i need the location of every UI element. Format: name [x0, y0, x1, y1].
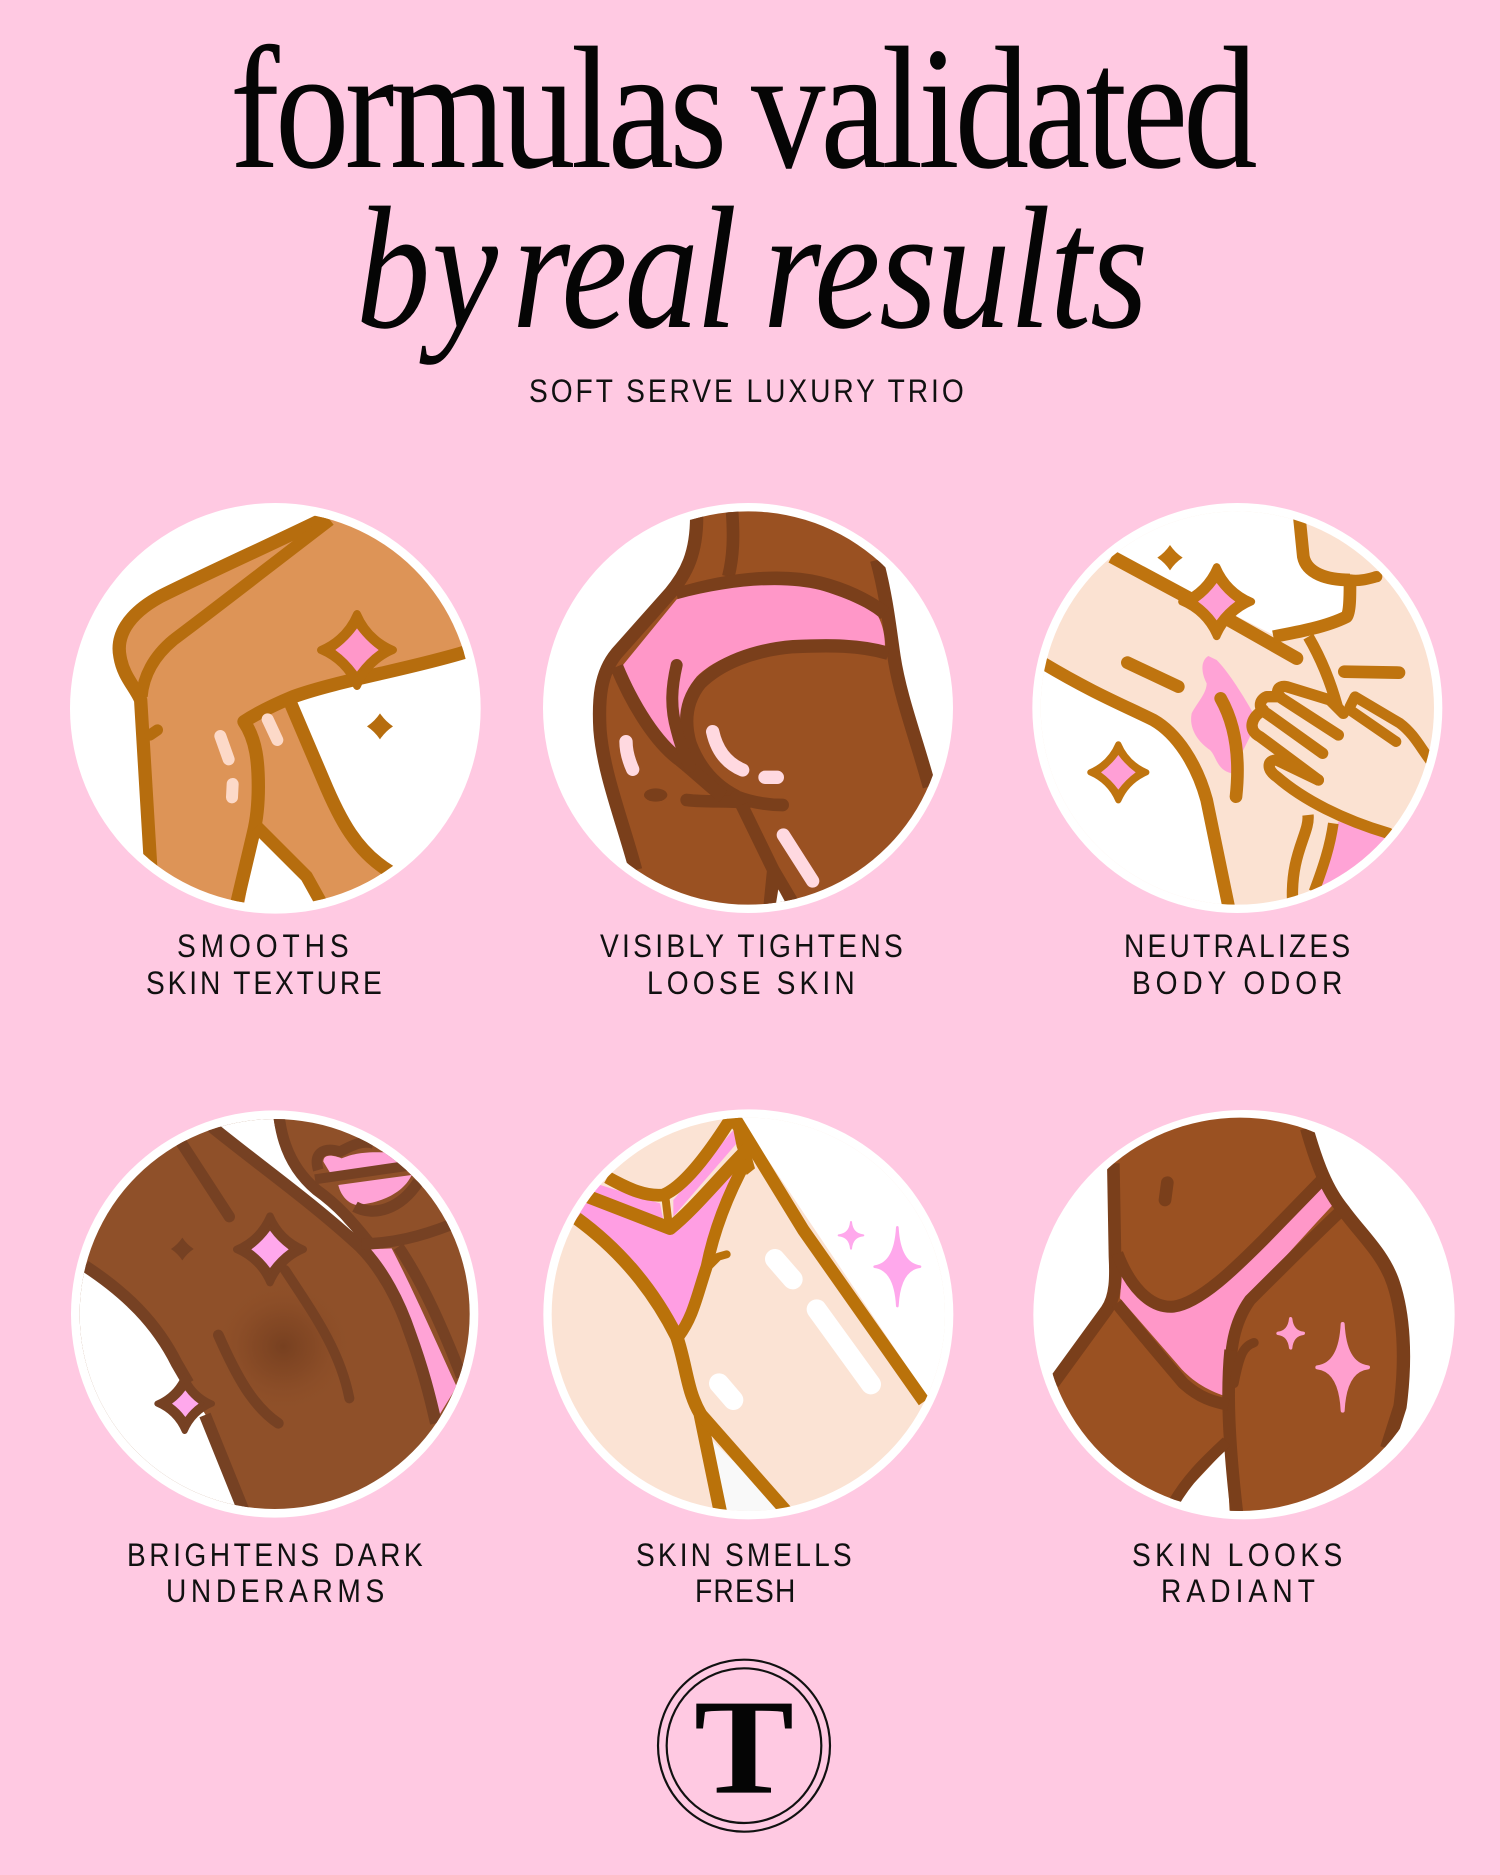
- label: RADIANT: [1161, 1574, 1315, 1609]
- icon: torso and hip: [1033, 1110, 1455, 1520]
- icon: dark underarm: [71, 1110, 478, 1518]
- subtitle: SOFT SERVE LUXURY TRIO: [529, 374, 964, 409]
- label: [600, 929, 903, 1001]
- panel: skin smells fresh: [543, 1109, 954, 1602]
- title: validated: [751, 12, 1258, 206]
- title: by: [356, 172, 499, 366]
- label: FRESH: [695, 1574, 795, 1609]
- label: LOOSE SKIN: [647, 966, 855, 1001]
- panel: brightens dark underarms: [71, 1110, 478, 1602]
- icon: sparkles: [1090, 545, 1251, 800]
- label: [636, 1538, 852, 1609]
- label: SKIN SMELLS: [636, 1538, 852, 1573]
- icon: sparkles: [839, 1222, 920, 1306]
- label: SKIN LOOKS: [1132, 1538, 1342, 1573]
- label: UNDERARMS: [166, 1574, 384, 1609]
- panel: neutralizes body odor: [1032, 503, 1442, 994]
- icon: underarm with hand: [1032, 503, 1442, 913]
- label: BODY ODOR: [1132, 966, 1342, 1001]
- logo: T monogram: [658, 1660, 830, 1832]
- logo: T monogram: T: [694, 1673, 794, 1823]
- icon: sparkle: [321, 614, 393, 686]
- label: SKIN TEXTURE: [146, 966, 382, 1001]
- label: SMOOTHS: [177, 929, 349, 964]
- title: [230, 12, 1258, 366]
- panel: visibly tightens loose skin: [543, 480, 953, 1001]
- icon: knee: [70, 503, 481, 914]
- panel: smooths skin texture: [70, 480, 481, 1001]
- title: results: [763, 172, 1148, 366]
- title: real: [512, 172, 737, 366]
- icon: buttocks: [543, 503, 953, 913]
- icon: hip and thigh: [543, 1109, 954, 1520]
- label: [127, 1538, 423, 1609]
- icon: sparkles: [1278, 1319, 1368, 1411]
- label: [1124, 929, 1350, 1001]
- label: [146, 929, 382, 1001]
- title: formulas: [230, 12, 727, 206]
- label: [1132, 1538, 1342, 1609]
- label: NEUTRALIZES: [1124, 929, 1350, 964]
- label: VISIBLY TIGHTENS: [600, 929, 903, 964]
- label: BRIGHTENS DARK: [127, 1538, 423, 1573]
- panel: skin looks radiant: [1033, 1110, 1455, 1602]
- icon: sparkles: [157, 1216, 303, 1431]
